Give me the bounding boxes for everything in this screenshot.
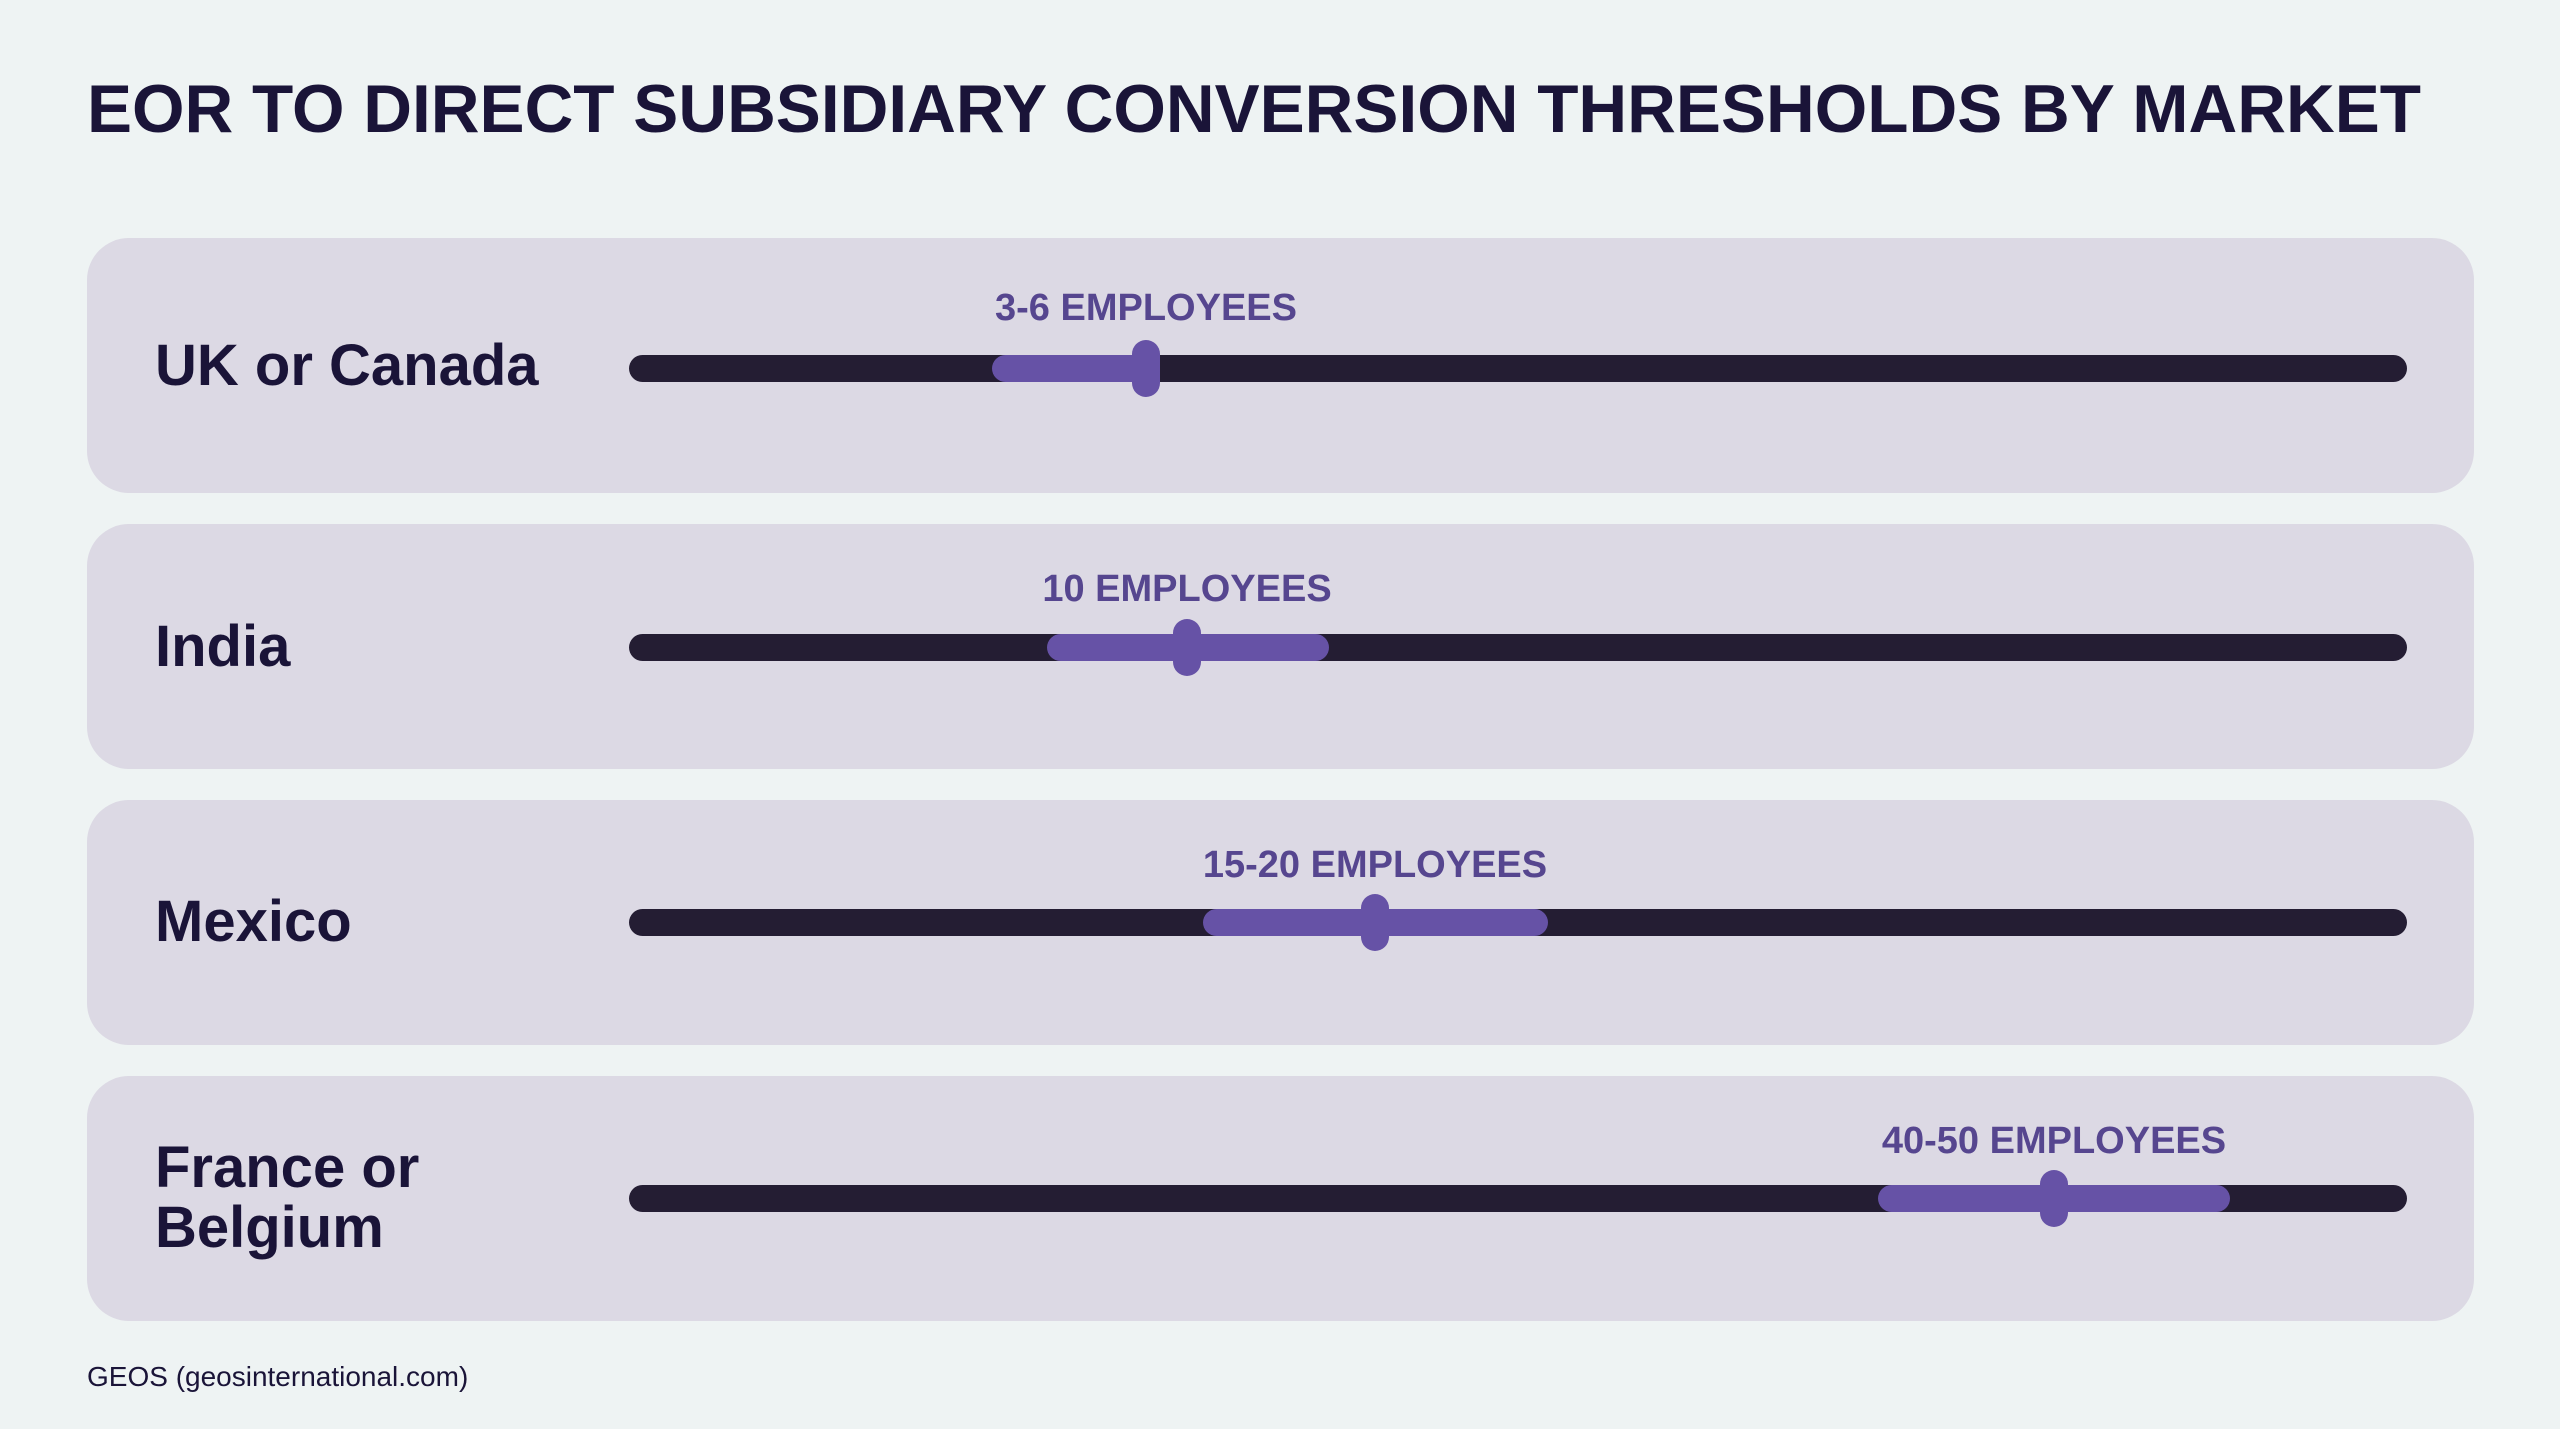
panel: India — [87, 524, 2474, 769]
footer source: GEOS (geosinternational.com) — [87, 1361, 468, 1392]
panel: UK or Canada — [87, 238, 2474, 493]
track — [629, 909, 2407, 936]
title: EOR TO DIRECT SUBSIDIARY CONVERSION THRESHOLDS BY MARKET — [87, 72, 2421, 147]
track — [629, 634, 2407, 661]
country label: UK or Canada — [155, 333, 539, 398]
threshold label: 15-20 EMPLOYEES — [1203, 844, 1547, 886]
track — [629, 355, 2407, 382]
highlight range — [992, 355, 1147, 382]
track — [629, 1185, 2407, 1212]
country label: France or — [155, 1135, 419, 1200]
country label: Mexico — [155, 889, 352, 954]
threshold label: 10 EMPLOYEES — [1042, 568, 1332, 610]
country label: India — [155, 614, 290, 679]
threshold label: 3-6 EMPLOYEES — [995, 287, 1297, 329]
marker — [1132, 340, 1160, 397]
marker — [1173, 619, 1201, 676]
marker — [2040, 1170, 2068, 1227]
threshold label: 40-50 EMPLOYEES — [1882, 1120, 2226, 1162]
highlight range — [1047, 634, 1329, 661]
panel: France or Belgium — [87, 1076, 2474, 1321]
highlight range — [1878, 1185, 2230, 1212]
country label: Belgium — [155, 1195, 384, 1260]
panel: Mexico — [87, 800, 2474, 1045]
highlight range — [1203, 909, 1548, 936]
country label — [155, 1135, 419, 1260]
marker — [1361, 894, 1389, 951]
